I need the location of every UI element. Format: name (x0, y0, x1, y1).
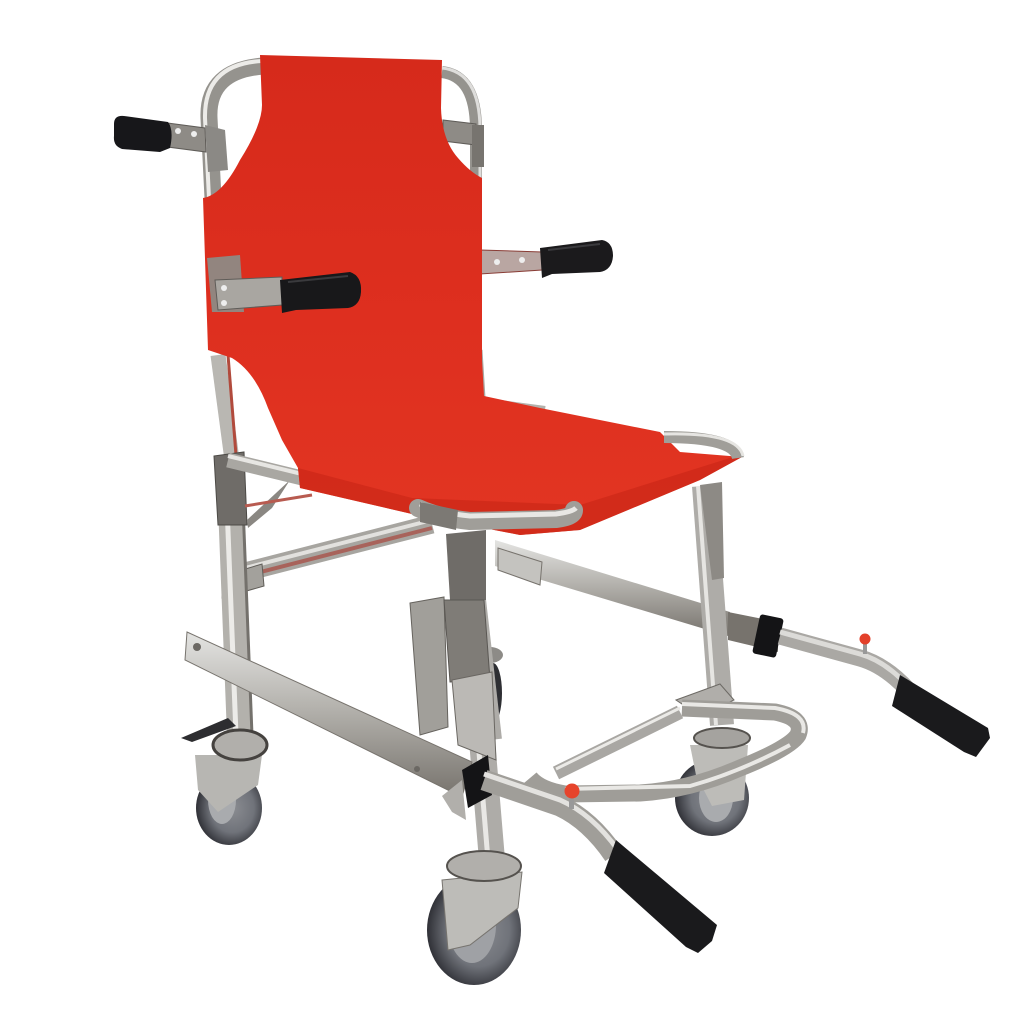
right rear wheel (675, 728, 750, 836)
back frame tube (205, 61, 545, 410)
front centre post (446, 530, 492, 860)
upper right bracket (443, 120, 484, 167)
right front post (676, 482, 734, 725)
footrest (530, 704, 804, 794)
right pull handle grip (892, 675, 990, 757)
backrest and seat fabric (203, 55, 742, 535)
front extension tube (484, 774, 618, 855)
right seat tube (664, 434, 743, 458)
front wheel (427, 851, 522, 985)
upper left push handle (114, 116, 228, 172)
front mid handle (207, 255, 361, 313)
rear cross tube (222, 520, 432, 598)
right mid handle (480, 240, 613, 278)
folding bracket plate (410, 597, 496, 760)
red pin on right rail (860, 634, 870, 654)
front rail clamp (442, 755, 492, 820)
front left rail (185, 632, 472, 797)
front pull handle grip (604, 840, 717, 953)
rear left post (214, 355, 312, 735)
left caster and wheel (181, 718, 267, 845)
rear tube of seat frame (228, 456, 302, 478)
red pin on front tube (564, 784, 580, 809)
front seat tube (418, 502, 576, 530)
seat shading (298, 457, 742, 535)
long bar: right carry rail (495, 540, 908, 690)
rear wheel behind seat (477, 647, 503, 723)
